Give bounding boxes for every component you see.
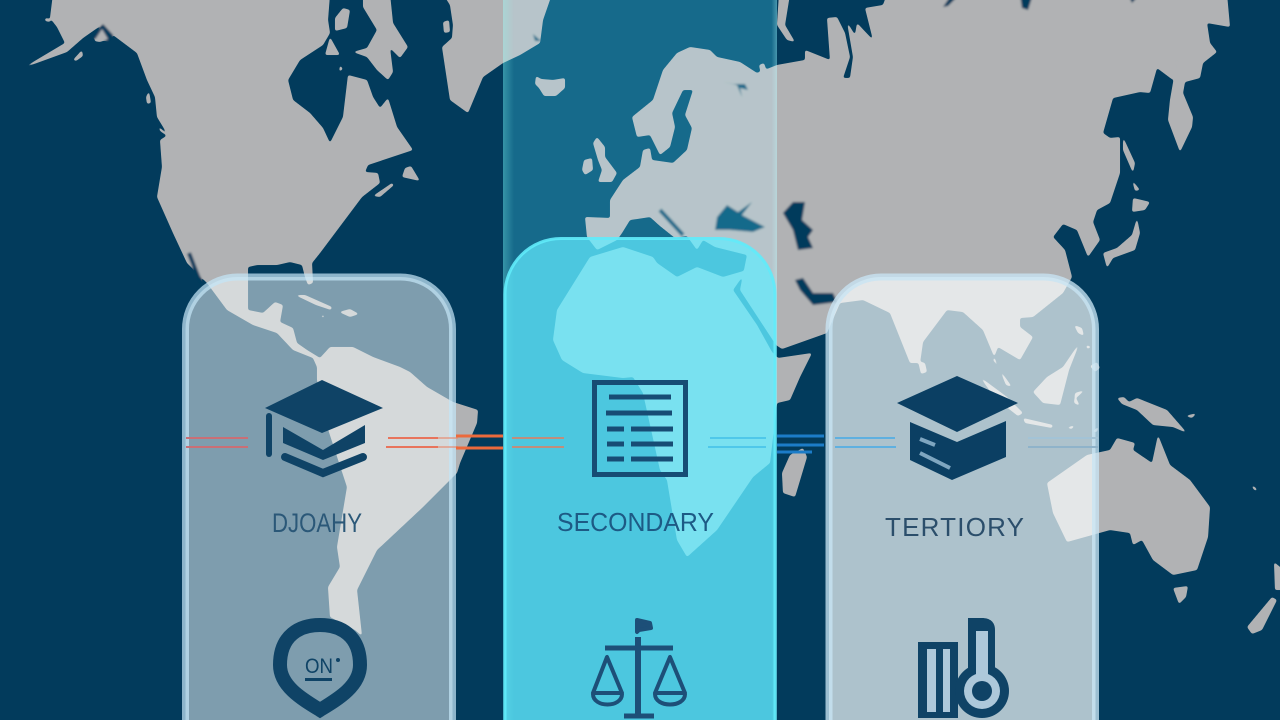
icon: scales of justice <box>593 620 685 716</box>
Gulf of California <box>189 253 201 284</box>
Madagascar <box>782 448 807 497</box>
Papua New Guinea <box>1102 387 1197 433</box>
Novaya Zemlya <box>777 0 795 42</box>
Eurasia <box>585 0 1230 387</box>
icon: books and thermometer <box>918 618 1009 718</box>
Africa <box>553 247 812 557</box>
Greenland <box>442 0 552 113</box>
label: tertiary: TERTIORY <box>885 512 1024 542</box>
Caribbean islands <box>295 295 364 318</box>
Newfoundland and Nova Scotia <box>373 166 420 197</box>
connector lines between panels <box>186 436 1098 452</box>
icon: shield badge: ON <box>305 655 333 678</box>
panel card <box>829 277 1096 720</box>
panel: primary <box>186 277 452 720</box>
Japan and Sakhalin <box>1103 137 1150 268</box>
panel card <box>186 277 452 720</box>
panel card <box>505 238 775 720</box>
label: secondary: SECONDARY <box>557 507 714 537</box>
Southeast Asia islands <box>918 325 1100 432</box>
icon: graduation cap <box>265 380 383 473</box>
Australia <box>1047 435 1210 575</box>
Canadian Arctic islands <box>325 0 408 80</box>
White Sea and Arctic details <box>723 0 1140 97</box>
strip edge highlights <box>503 0 777 720</box>
panel: secondary <box>503 0 777 720</box>
icon: document <box>594 382 686 474</box>
label: primary: DJOAHY <box>272 508 362 538</box>
Iceland <box>535 76 565 96</box>
upper glass strip <box>503 0 777 720</box>
icon: graduation cap <box>897 376 1018 480</box>
Tasmania and New Zealand <box>1173 485 1280 634</box>
Britain and Ireland <box>582 137 617 182</box>
panel: tertiary <box>829 277 1096 720</box>
icon: shield badge <box>280 625 360 710</box>
Adriatic, Black Sea, Caspian, Persian Gulf <box>660 210 683 235</box>
North and South America <box>23 0 478 636</box>
Alaska and Pacific coast islands <box>92 24 113 42</box>
